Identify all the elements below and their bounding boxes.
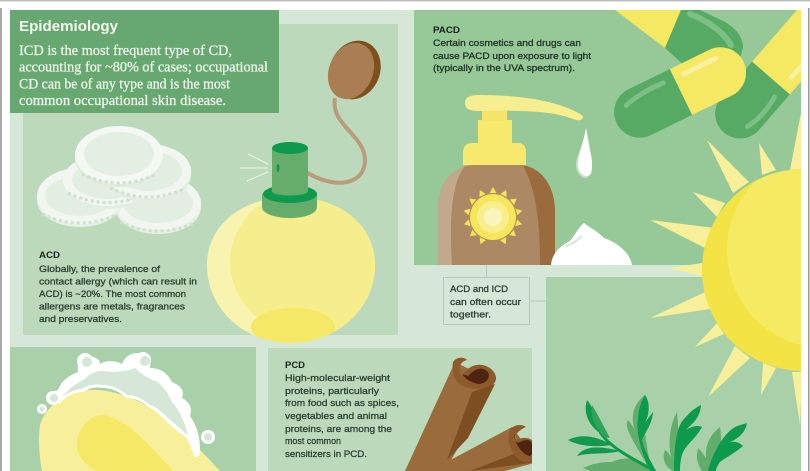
text: PACD: cause PACD upon exposure to light — [433, 51, 591, 62]
text: PACD — [433, 25, 591, 74]
text: ACD: contact allergy (which can result in — [39, 276, 197, 288]
text: PCD: proteins, are among the — [285, 424, 392, 435]
text: PACD: Certain cosmetics and drugs can — [433, 38, 581, 49]
panel: soap — [10, 347, 256, 471]
icon: sunscreen bottle — [430, 95, 583, 265]
panel: herb — [546, 277, 801, 471]
panel: PACD — [414, 1, 810, 265]
text: Epidemiology body — [19, 43, 268, 109]
text: Epidemiology body: accounting for ~80% of cases; occupational — [19, 60, 268, 76]
text: ACD: ACD — [39, 250, 60, 261]
text: PCD: from food such as spices, — [285, 398, 399, 409]
icon: herb sprigs — [568, 395, 747, 471]
text: Epidemiology body: ICD is the most frequent type of CD, — [19, 43, 232, 59]
text: Epidemiology body: common occupational skin disease. — [19, 93, 226, 109]
text: PACD: (typically in the UVA spectrum). — [433, 63, 575, 74]
panel: Epidemiology — [10, 10, 279, 113]
text: PCD — [285, 360, 399, 460]
icon: perfume bottle — [207, 40, 381, 343]
icon: lotion drop — [576, 128, 592, 178]
panel: PCD — [268, 348, 538, 471]
heading: Epidemiology: Epidemiology — [19, 19, 118, 35]
text: ACD: and preservatives. — [39, 314, 122, 325]
callout: ACD and ICD: together. — [450, 310, 491, 320]
text: ACD — [39, 250, 197, 325]
icon: cinnamon sticks — [405, 358, 538, 471]
text: ACD: Globally, the prevalence of — [39, 264, 160, 275]
callout: ACD and ICD — [444, 265, 546, 324]
text: PACD: PACD — [433, 25, 460, 36]
text: Epidemiology body: CD can be of any type and is the most — [19, 76, 230, 92]
icon: capsules — [614, 10, 801, 138]
text: PCD: sensitizers in PCD. — [285, 449, 367, 460]
text: PCD: proteins, particularly — [285, 386, 379, 397]
text: PCD: High-molecular-weight — [285, 373, 390, 384]
icon: soap bar with foam — [37, 352, 220, 471]
callout: ACD and ICD: can often occur — [450, 297, 522, 308]
text: PCD: PCD — [285, 360, 305, 371]
text: ACD: allergens are metals, fragrances — [39, 302, 185, 312]
icon: cream swirl — [551, 223, 632, 265]
text: PCD: vegetables and animal — [285, 411, 387, 422]
icon: sun — [650, 113, 810, 425]
text: PCD: most common — [285, 436, 341, 447]
text: ACD: ACD) is ~20%. The most common — [39, 289, 186, 300]
callout: ACD and ICD: ACD and ICD — [450, 284, 508, 295]
icon: cotton pads — [37, 126, 201, 234]
panel: ACD — [23, 24, 402, 346]
